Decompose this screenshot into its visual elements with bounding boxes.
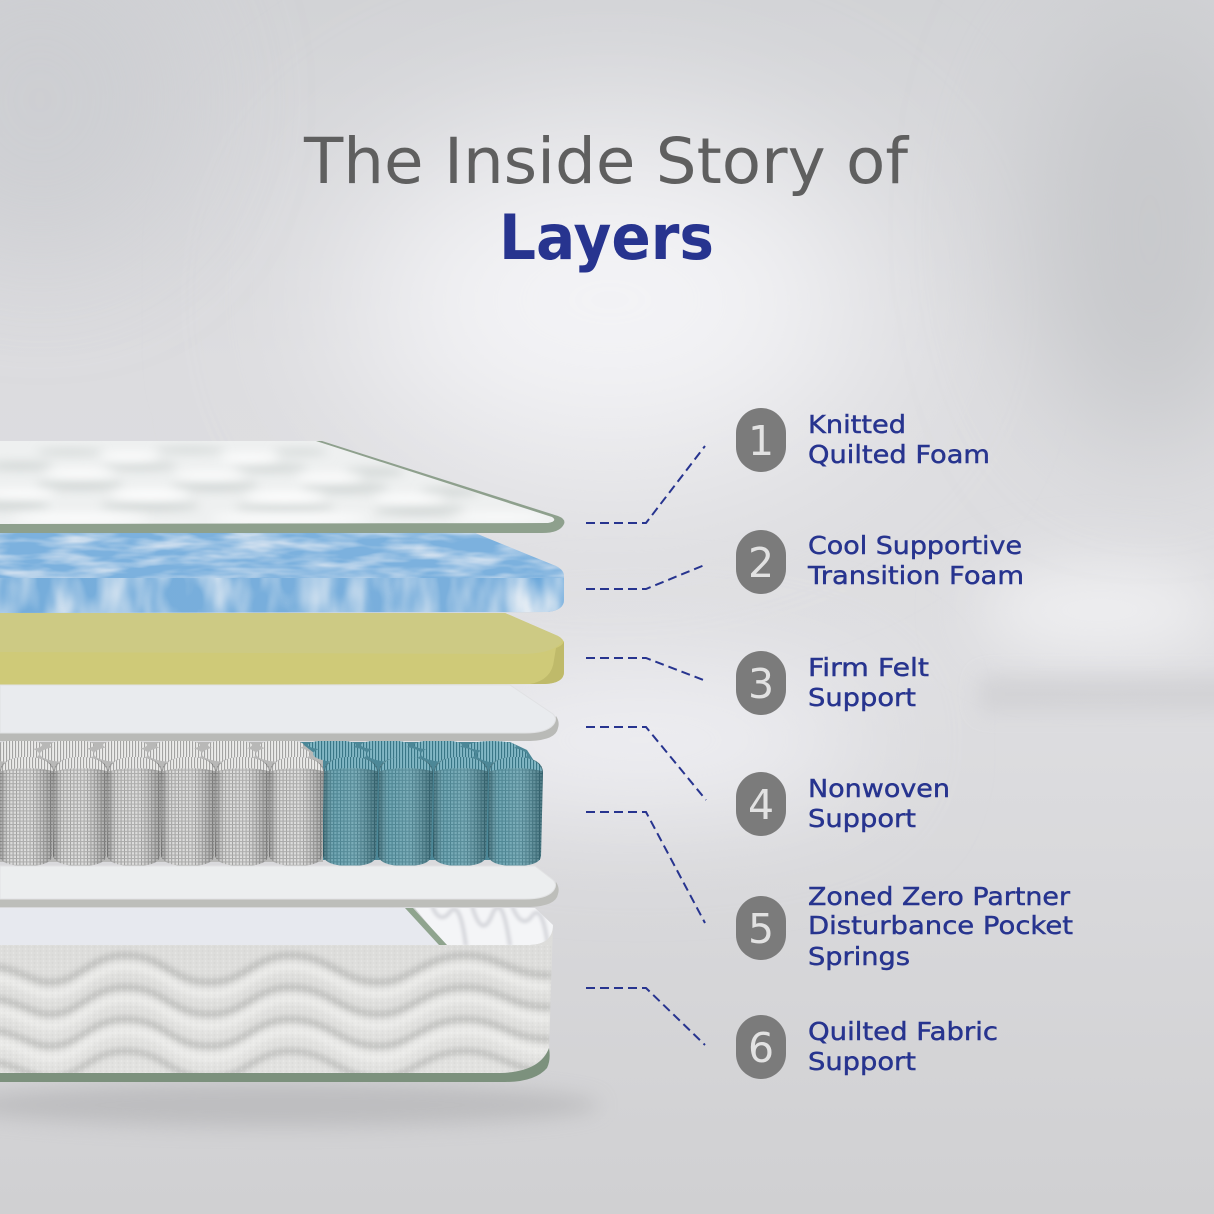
title <box>303 125 910 274</box>
inner floor <box>0 908 440 945</box>
mattress layer 3: firm felt support <box>0 613 564 685</box>
label 4: nonwoven support: Nonwoven <box>808 774 950 803</box>
mattress layer 4: nonwoven support <box>0 685 559 741</box>
label 6: quilted fabric support <box>736 1015 998 1079</box>
front row gray springs <box>0 757 324 866</box>
label 2: cool supportive transition foam <box>736 530 1024 594</box>
mattress layer 6: quilted fabric base <box>0 906 560 1082</box>
label 5: zoned zero partner disturbance pocket springs: Disturbance Pocket <box>808 911 1073 940</box>
label 6: quilted fabric support: 6 <box>748 1024 774 1072</box>
label 3: firm felt support: 3 <box>748 660 774 708</box>
back rows gray springs <box>0 740 310 762</box>
front panel <box>0 925 553 1074</box>
label 1: knitted quilted foam: 1 <box>748 417 774 465</box>
title: The Inside Story of <box>303 125 910 198</box>
inner wall <box>415 908 553 945</box>
back rows teal springs <box>308 740 527 763</box>
label 5: zoned zero partner disturbance pocket springs: Springs <box>808 942 910 971</box>
mattress layer 1: knitted quilted foam <box>0 441 564 533</box>
label 5: zoned zero partner disturbance pocket springs <box>736 882 1073 971</box>
label 4: nonwoven support <box>736 772 950 836</box>
leader lines <box>586 446 707 1045</box>
green base band <box>0 1048 550 1082</box>
label 2: cool supportive transition foam: Transition Foam <box>807 561 1024 590</box>
mattress layer 2: cool supportive transition foam <box>0 533 570 614</box>
mattress layer 5: zoned pocket springs <box>0 740 543 866</box>
label 1: knitted quilted foam <box>736 408 990 472</box>
label 6: quilted fabric support: Support <box>808 1047 916 1076</box>
label 4: nonwoven support: Support <box>808 804 916 833</box>
label 1: knitted quilted foam: Quilted Foam <box>808 440 990 469</box>
spring block backing <box>0 742 323 862</box>
green corner edge <box>405 908 447 945</box>
label 3: firm felt support: Support <box>808 683 916 712</box>
front row teal springs <box>323 757 543 866</box>
label 3: firm felt support <box>736 651 929 715</box>
label 1: knitted quilted foam: Knitted <box>808 410 906 439</box>
label 3: firm felt support: Firm Felt <box>808 653 929 682</box>
title: Layers <box>499 201 714 274</box>
label 2: cool supportive transition foam: Cool Supportive <box>808 531 1022 560</box>
label 5: zoned zero partner disturbance pocket springs: Zoned Zero Partner <box>808 882 1071 911</box>
mattress layer 5b: lower nonwoven sheet <box>0 866 559 908</box>
label 2: cool supportive transition foam: 2 <box>748 539 774 587</box>
label 5: zoned zero partner disturbance pocket springs: 5 <box>748 905 774 953</box>
label 6: quilted fabric support: Quilted Fabric <box>808 1017 998 1046</box>
label 4: nonwoven support: 4 <box>748 781 774 829</box>
